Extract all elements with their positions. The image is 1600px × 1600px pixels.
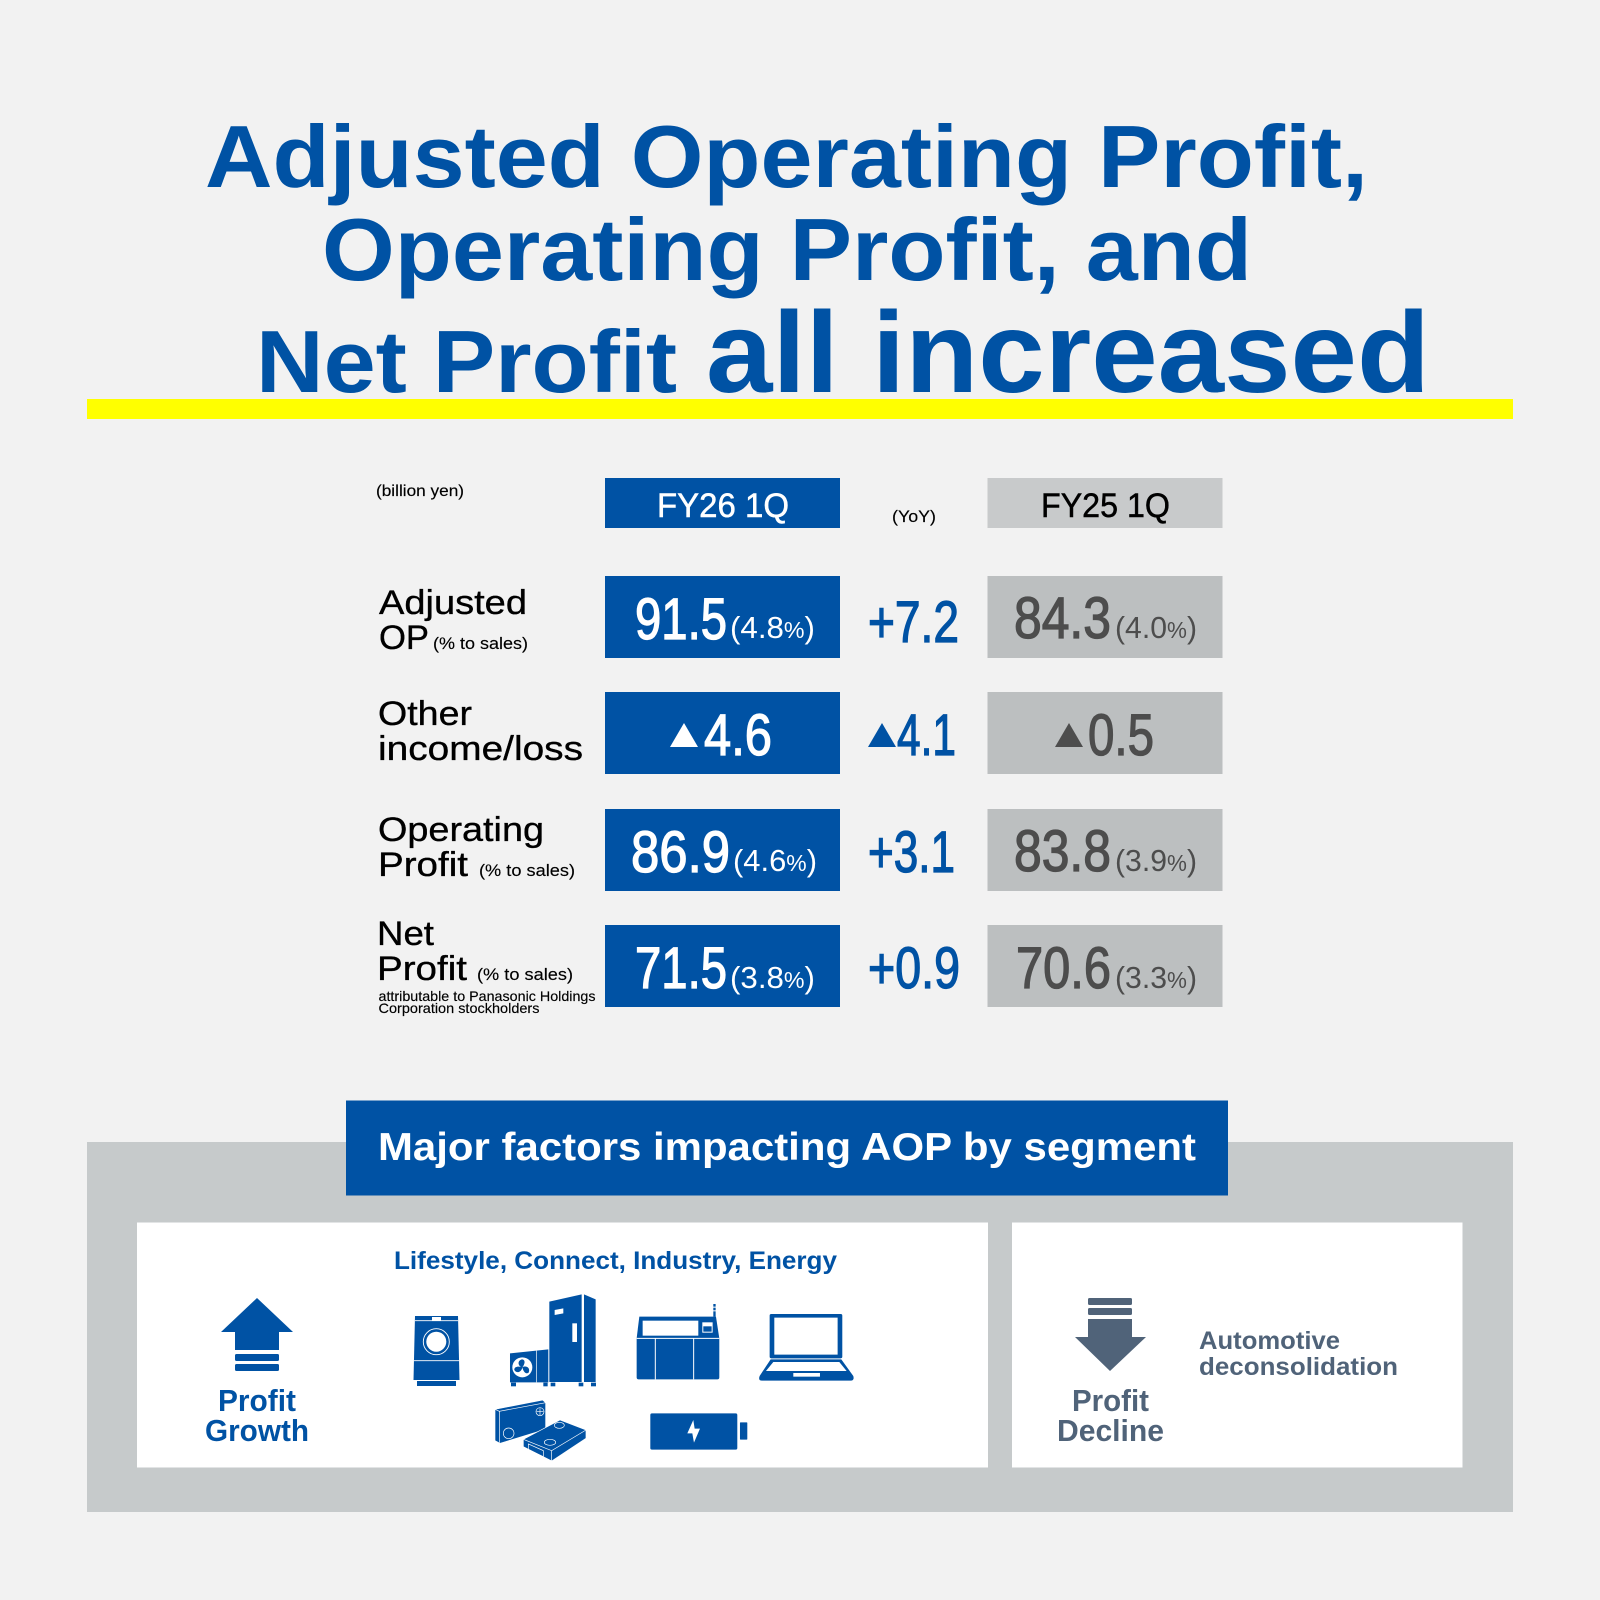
results table — [376, 478, 1222, 1016]
FY25 value — [988, 925, 1222, 1007]
FY25 value — [988, 809, 1222, 891]
FY26 value — [605, 692, 840, 774]
column header: FY25 1Q — [988, 478, 1222, 528]
FY26 value — [605, 809, 840, 891]
decline factor text — [1199, 1327, 1398, 1381]
title: Operating Profit, and — [322, 200, 1252, 299]
panel: major factors — [87, 1100, 1513, 1512]
panel: profit decline — [1012, 1222, 1462, 1468]
title: all increased — [706, 289, 1430, 417]
FY25 value: 83.8 — [1014, 819, 1111, 884]
icon: up arrow — [221, 1298, 293, 1371]
icon: down arrow — [1075, 1298, 1146, 1371]
icon: production machine — [637, 1304, 719, 1379]
FY26 value: 86.9 — [631, 820, 730, 885]
row label: Operating — [378, 811, 544, 849]
row label: (% to sales) — [479, 861, 575, 880]
unit note: (billion yen) — [376, 483, 464, 500]
profit decline label — [1057, 1384, 1164, 1448]
decline factor text: deconsolidation — [1199, 1353, 1398, 1381]
YoY change: +3.1 — [868, 820, 955, 885]
row: Other income/loss — [378, 692, 1222, 774]
FY26 value: (4.8%) — [730, 610, 815, 645]
panel heading — [346, 1100, 1228, 1196]
column header: FY26 1Q — [605, 478, 840, 528]
icon: heat pump and fuel cell — [510, 1294, 596, 1386]
row label: income/loss — [378, 730, 583, 768]
icon: battery modules — [495, 1400, 586, 1461]
FY25 value: (3.9%) — [1115, 843, 1197, 878]
FY25 value: 70.6 — [1016, 936, 1111, 1001]
profit growth label — [205, 1384, 309, 1448]
profit decline label: Profit — [1072, 1384, 1149, 1418]
icon: laptop — [759, 1314, 854, 1381]
title — [205, 107, 1430, 417]
profit decline label: Decline — [1057, 1414, 1164, 1448]
row label: Net — [377, 915, 435, 953]
FY26 value — [605, 925, 840, 1007]
FY25 value — [988, 576, 1222, 658]
row label: Profit — [378, 846, 469, 884]
FY25 value: 84.3 — [1014, 586, 1111, 651]
title: Adjusted Operating Profit, — [205, 107, 1368, 206]
row label — [378, 811, 575, 884]
icon: washing machine — [414, 1316, 460, 1386]
profit growth label: Growth — [205, 1414, 309, 1448]
row label — [378, 695, 583, 768]
segment list heading: Lifestyle, Connect, Industry, Energy — [394, 1247, 837, 1275]
row label: Profit — [377, 950, 468, 988]
row label — [379, 584, 528, 657]
FY25 value: 0.5 — [1088, 703, 1154, 768]
panel background — [87, 1142, 1513, 1512]
panel: profit growth — [137, 1222, 988, 1468]
icon: battery — [650, 1413, 747, 1450]
FY26 value: 71.5 — [635, 936, 727, 1001]
row: Adjusted OP — [379, 576, 1222, 658]
row label: (% to sales) — [477, 965, 573, 984]
column header: FY26 1Q: FY26 1Q — [657, 487, 789, 525]
YoY change — [868, 703, 956, 768]
FY25 value: (4.0%) — [1115, 610, 1197, 645]
row: Operating Profit — [378, 809, 1222, 891]
YoY change: +0.9 — [868, 936, 960, 1001]
title: Net Profit — [256, 312, 677, 411]
FY26 value: (3.8%) — [730, 960, 815, 995]
row label: (% to sales) — [433, 634, 528, 653]
row label: Corporation stockholders — [378, 1000, 540, 1016]
panel heading: Major factors impacting AOP by segment — [378, 1126, 1196, 1169]
FY26 value: 91.5 — [635, 587, 727, 652]
FY25 value: (3.3%) — [1115, 960, 1197, 995]
decline factor text: Automotive — [1199, 1327, 1340, 1355]
row: Net Profit — [377, 915, 1222, 1016]
profit growth label: Profit — [218, 1384, 296, 1418]
row label: Adjusted — [379, 584, 527, 622]
YoY change: 4.1 — [897, 703, 956, 768]
row label — [377, 915, 596, 1016]
row label: OP — [379, 619, 429, 657]
FY25 value — [988, 692, 1222, 774]
column header: FY25 1Q: FY25 1Q — [1041, 487, 1170, 525]
column header: YoY: (YoY) — [892, 507, 936, 526]
row label: Other — [378, 695, 472, 733]
FY26 value: 4.6 — [704, 703, 772, 768]
yellow underline — [87, 399, 1513, 419]
YoY change: +7.2 — [868, 590, 959, 655]
FY26 value: (4.6%) — [733, 843, 817, 878]
row label: attributable to Panasonic Holdings — [378, 988, 596, 1004]
FY26 value — [605, 576, 840, 658]
